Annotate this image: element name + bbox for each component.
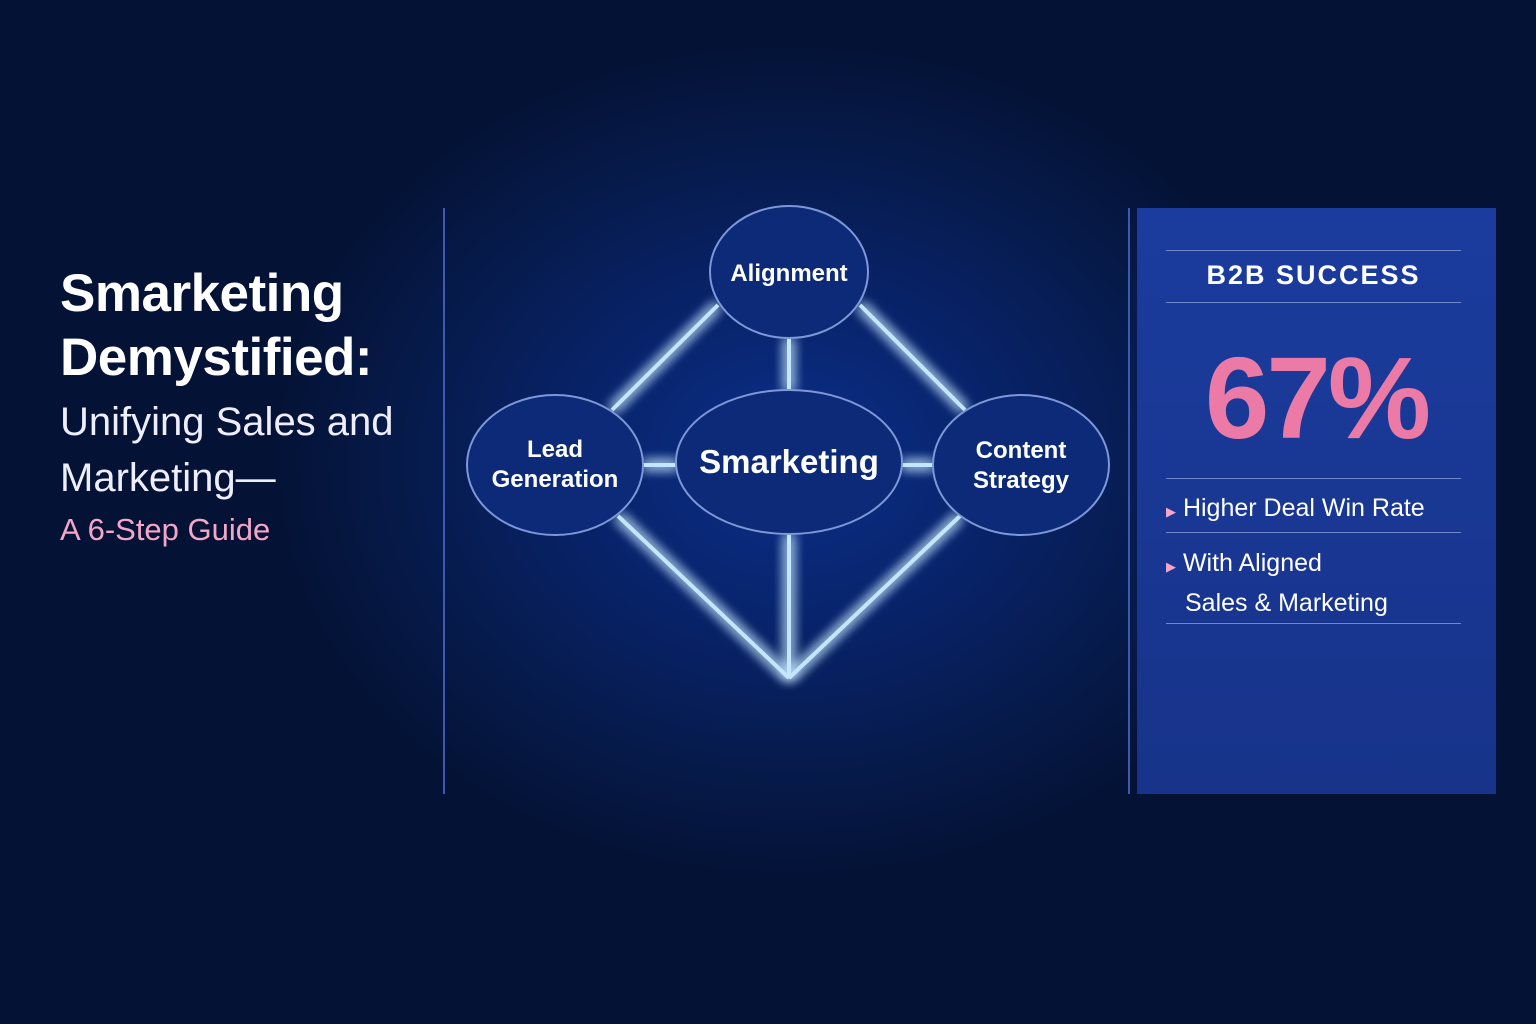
title block [60, 264, 394, 547]
node: Content Strategy [933, 395, 1109, 535]
panel: B2B success stat [1137, 208, 1496, 794]
bullet 2 [1166, 549, 1388, 617]
node: Lead Generation: Generation [492, 466, 618, 493]
title: Smarketing [60, 264, 344, 323]
node: Alignment [710, 206, 868, 338]
tagline: A 6-Step Guide [60, 512, 270, 547]
divider left [443, 208, 445, 794]
node: Lead Generation [467, 395, 643, 535]
node: Smarketing [676, 390, 902, 534]
big stat: 67% [1205, 333, 1428, 463]
bullet 1: ▶ Higher Deal Win Rate [1166, 494, 1425, 522]
title: Demystified: [60, 328, 372, 387]
subtitle: Unifying Sales and Marketing— [60, 400, 394, 500]
node: Content Strategy: Content [976, 437, 1066, 464]
node: Lead Generation: Lead [527, 436, 583, 463]
bullet 2: Sales & Marketing [1185, 589, 1388, 617]
panel heading: B2B SUCCESS [1206, 260, 1421, 290]
bullet 2: ▶ With Aligned [1166, 549, 1322, 577]
connector lines [612, 305, 965, 678]
node: Alignment: Alignment [730, 260, 848, 287]
node: Content Strategy: Strategy [973, 467, 1070, 494]
title [60, 264, 372, 387]
divider right [1128, 208, 1130, 794]
node: Smarketing: Smarketing [699, 443, 879, 480]
